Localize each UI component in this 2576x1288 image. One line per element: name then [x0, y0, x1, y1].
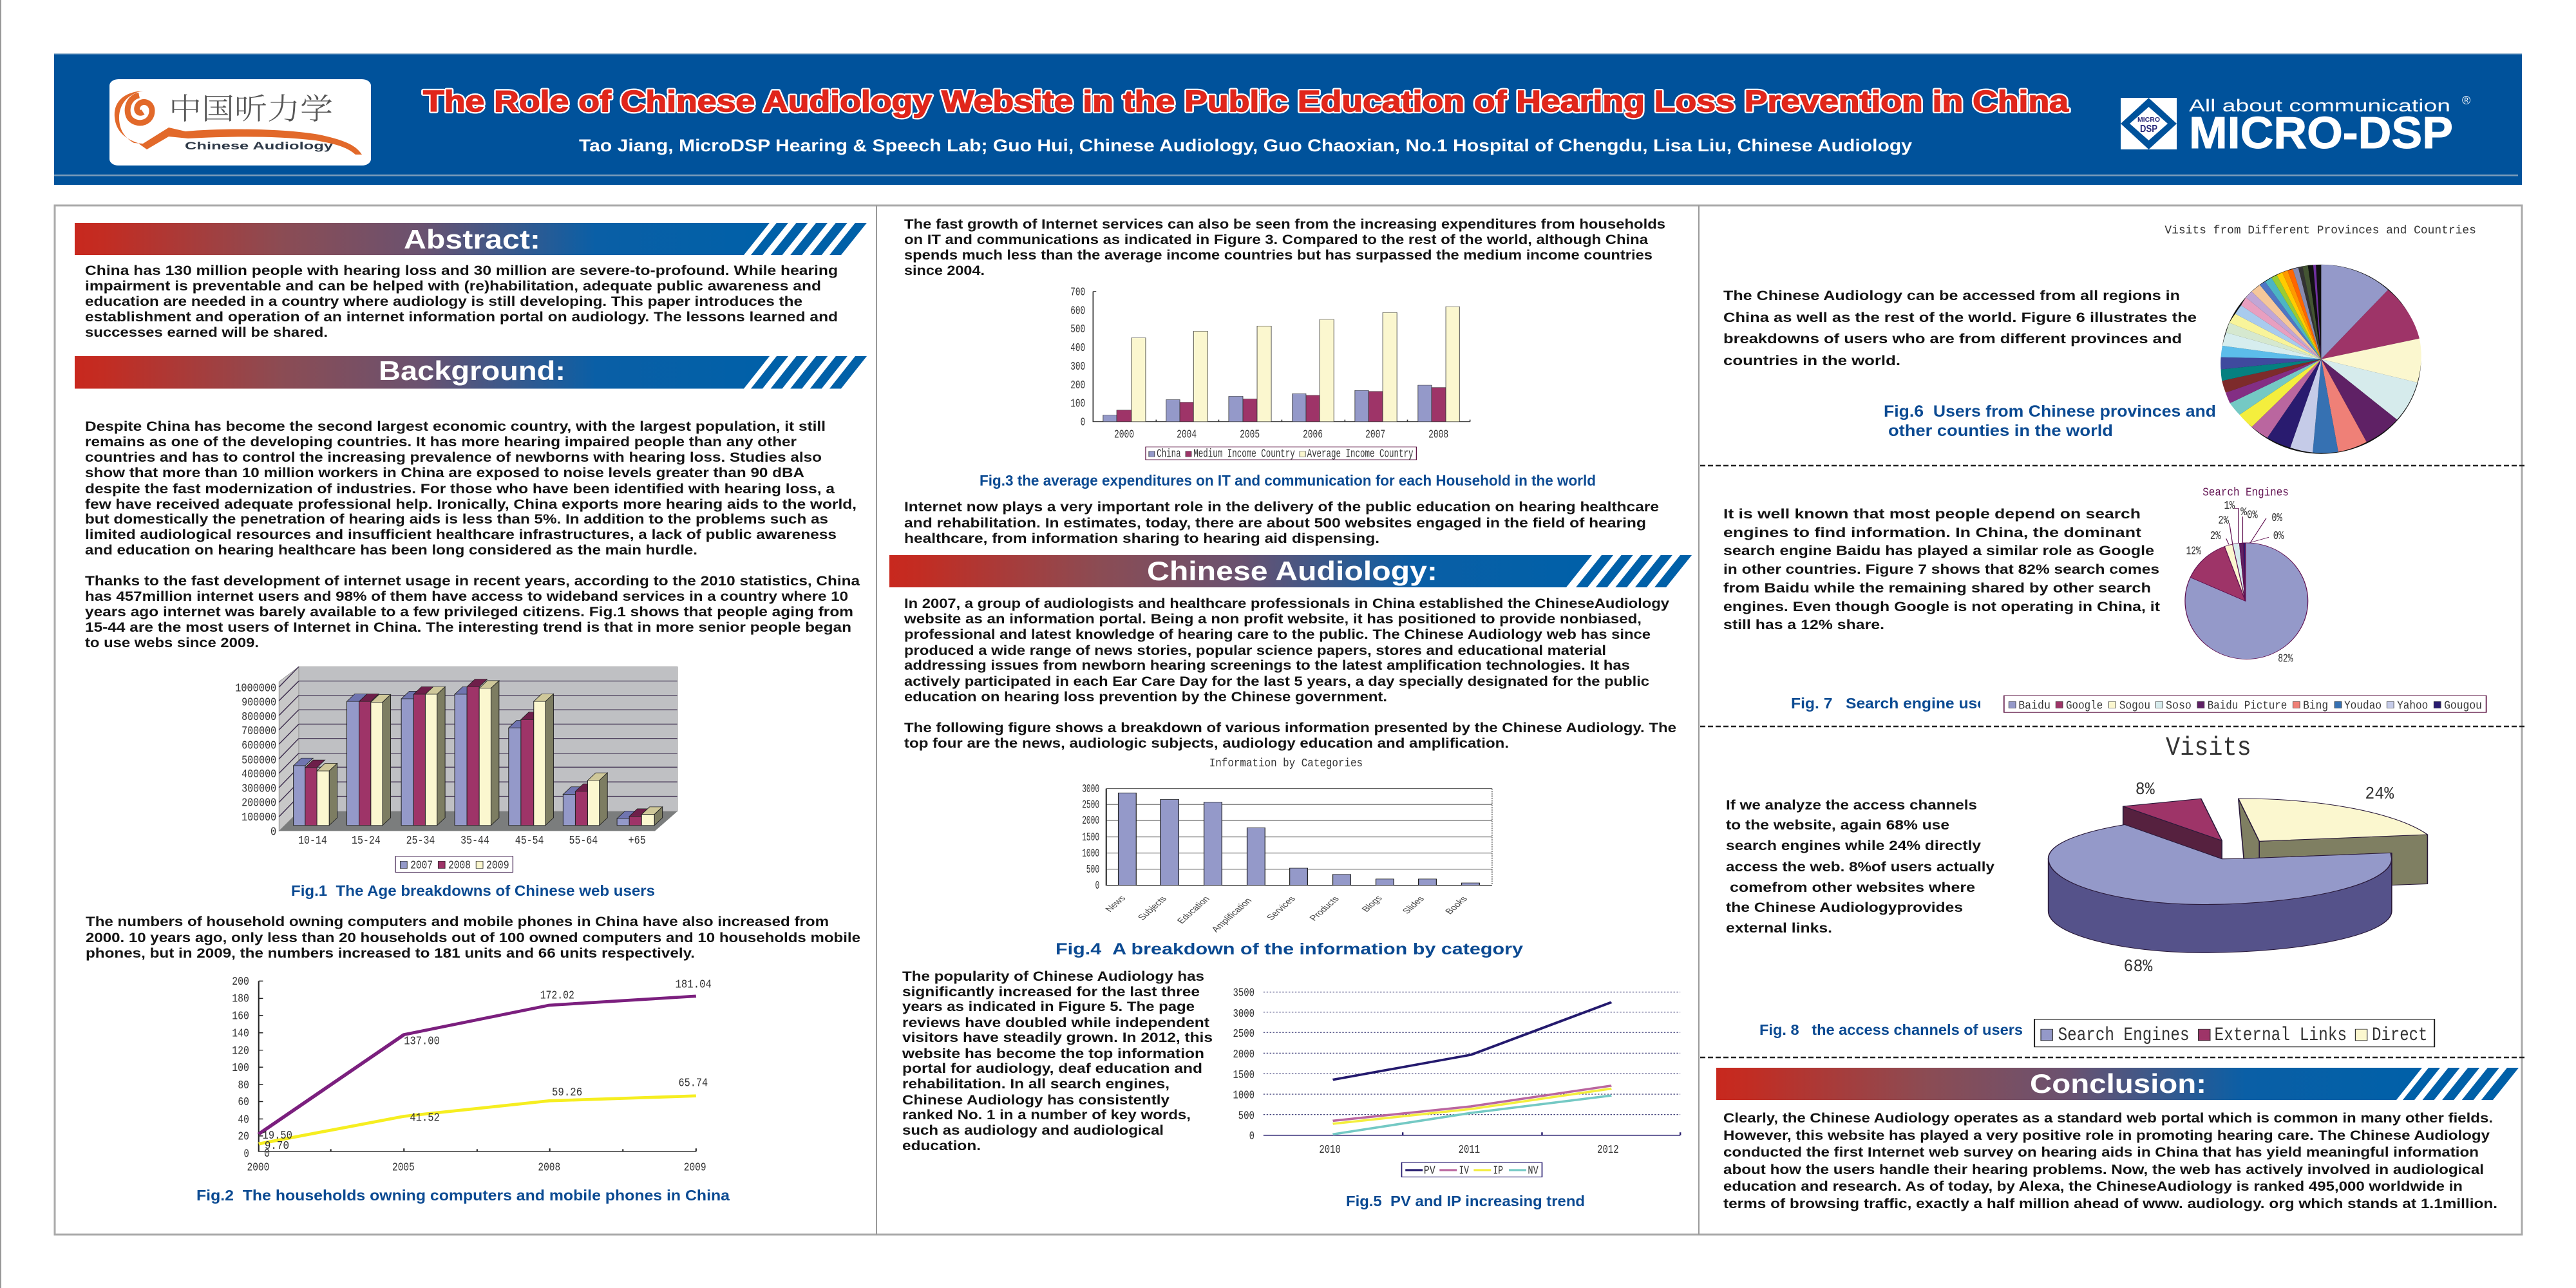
chart: Fig.2 household line chart: 120	[232, 1044, 249, 1057]
chart: Fig.2 household line chart: 2005	[392, 1160, 415, 1174]
chart: Fig.1 3D bars of age breakdown: 0	[270, 825, 276, 838]
bars: 55-64	[563, 773, 607, 826]
text: background paragraph 2	[85, 574, 860, 650]
text: popularity: The popularity of Chinese Audiology has	[902, 969, 1204, 984]
legend: Fig.8: Direct	[2372, 1025, 2427, 1046]
text: internet expenditures: spends much less than the average income countries but has surpassed the medium income countries	[904, 248, 1653, 263]
text: search engines: still has a 12% share.	[1723, 618, 1884, 632]
text: search engines: search engine Baidu has played a similar role as Google	[1723, 544, 2154, 558]
text: background paragraph 1: limited audiological resources and insufficient healthcare infrastructures, a lack of public awareness	[85, 527, 837, 542]
chart: Fig.8 visits 3D pie: 68%	[2124, 956, 2153, 976]
slice: direct 24%	[2239, 799, 2427, 885]
text: Chinese Audiology description: actively participated in each Ear Care Day for the last 5 years, a day specially designated for the public	[904, 674, 1649, 689]
chart: Fig.7 search engines pie: 82%	[2278, 652, 2293, 666]
heading: Chinese Audiology: Chinese Audiology:	[1147, 556, 1437, 586]
chart: Fig.5 PV and IP trend: 500	[1238, 1110, 1255, 1122]
chart: Fig.7 search engines pie: 0%	[2247, 509, 2258, 522]
chart: Fig.5 PV and IP trend: 3000	[1233, 1008, 1255, 1021]
chart: Fig.4 information by categories: Slides	[1400, 895, 1427, 915]
chart: Fig.5 PV and IP trend	[1233, 987, 1680, 1178]
chart: Fig.1 3D bars of age breakdown: 300000	[242, 782, 276, 795]
text: access channels: the Chinese Audiologyprovides	[1726, 900, 1963, 915]
text: popularity: significantly increased for the last three	[902, 985, 1200, 999]
chart: Fig.4 information by categories: Blogs	[1359, 895, 1385, 913]
text: Chinese Audiology description: addressing issues from newborn hearing screenings to the latest amplification technologies. It has	[904, 658, 1630, 673]
text: access channels: external links.	[1726, 921, 1832, 936]
legend: Fig.8: External Links	[2215, 1025, 2347, 1046]
chart: Fig.3 expenditures: 2005	[1240, 428, 1260, 442]
bars: +65	[617, 807, 663, 826]
text: Chinese Audiology description: education on hearing loss prevention by the Chinese government.	[904, 690, 1387, 705]
chart: Fig.2 household line chart: 60	[238, 1095, 249, 1108]
text: background paragraph 1: and education on hearing healthcare has been long considered as the main hurdle.	[85, 543, 697, 558]
title: The Role of Chinese Audiology Website in the Public Education of Hearing Loss Prevention in China	[423, 84, 2069, 118]
text: popularity: website has become the top information	[902, 1046, 1204, 1061]
line: IP	[1333, 1088, 1611, 1124]
chart: Fig.1 3D bars of age breakdown: 45-54	[515, 833, 544, 847]
caption: Fig.5: Fig.5 PV and IP increasing trend	[1346, 1193, 1585, 1209]
text: search engines: It is well known that most people depend on search	[1723, 507, 2141, 522]
text: conclusion: about how the users handle their hearing problems. Now, the web has actively involved in audiological	[1723, 1162, 2484, 1177]
text: popularity	[902, 969, 1213, 1153]
text: internet expenditures: The fast growth of Internet services can also be seen from the increasing expenditures from households	[904, 217, 1665, 232]
text: household ownership: 2000. 10 years ago, only less than 20 households out of 100 owned computers and 10 households mobile	[86, 931, 860, 945]
text: background paragraph 1: despite the fast modernization of industries. For those who have been identified with hearing loss, a	[85, 482, 835, 497]
panel: right column	[1700, 224, 2524, 1211]
chart: Fig.2 household line chart: 137.00	[404, 1034, 440, 1048]
text: household ownership: The numbers of household owning computers and mobile phones in China have also increased from	[86, 914, 829, 929]
chart: Fig.1 3D bars of age breakdown: 500000	[242, 753, 276, 767]
caption: Fig.1: Fig.1 The Age breakdowns of Chinese web users	[291, 882, 655, 899]
chart: Fig.2 household line chart: 2009	[684, 1160, 706, 1174]
text: background paragraph 2: Thanks to the fast development of internet usage in recent years, according to the 2010 statistics, China	[85, 574, 860, 589]
caption: Fig.3: Fig.3 the average expenditures on IT and communication for each Household in the world	[980, 472, 1596, 489]
header banner	[54, 53, 2522, 185]
chart: Fig.2 household line chart	[232, 975, 712, 1174]
legend: Fig.8	[2034, 1019, 2434, 1047]
legend: Fig.1: 2007	[410, 858, 433, 872]
legend: Fig.5: NV	[1528, 1164, 1539, 1178]
caption: Fig.8: Fig. 8 the access channels of users	[1759, 1021, 2023, 1038]
panel: middle column	[889, 217, 1692, 1209]
caption: Fig.6: Fig.6 Users from Chinese provinces and	[1884, 402, 2216, 421]
heading: Abstract	[75, 223, 867, 255]
line: computers	[259, 996, 696, 1134]
legend: Fig.5	[1402, 1162, 1542, 1178]
logo: MICRO-DSP: All about communication	[2189, 96, 2450, 115]
chart: Fig.2 household line chart: 65.74	[678, 1076, 708, 1090]
chart: Fig.2 household line chart: 180	[232, 992, 249, 1005]
chart: Fig.4 information by categories: 0	[1095, 880, 1099, 893]
chart: Fig.4 information by categories: Products	[1307, 895, 1342, 922]
chart: Fig.3 expenditures	[1070, 286, 1470, 460]
chart: Fig.4 information by categories: 2000	[1082, 815, 1099, 828]
legend: Fig.7: Google	[2066, 699, 2103, 713]
chart: Fig.5 PV and IP trend: 2011	[1459, 1144, 1480, 1157]
chart: Fig.7 search engines pie: 2%	[2218, 514, 2229, 527]
bars: 25-34	[401, 687, 445, 826]
legend: Fig.5: PV	[1424, 1164, 1435, 1178]
text: Chinese Audiology description: In 2007, a group of audiologists and healthcare professionals in China established the ChineseAudiology	[904, 596, 1669, 611]
text: abstract: successes earned will be shared.	[85, 325, 328, 340]
logo: Chinese Audiology: 中国听力学	[169, 86, 333, 128]
chart: Fig.2 household line chart: 172.02	[540, 989, 574, 1002]
text: background paragraph 2: 15-44 are the most users of Internet in China. The interesting trend is that in more senior people began	[85, 620, 851, 635]
legend: Fig.7: Gougou	[2444, 699, 2482, 713]
text: access channels: access the web. 8%of users actually	[1726, 860, 1994, 875]
text: background paragraph 1: Despite China has become the second largest economic country, with the largest population, it still	[85, 419, 826, 434]
chart: Fig.1 3D bars of age breakdown: 800000	[242, 710, 276, 724]
chart: Fig.1 3D bars of age breakdown: +65	[629, 833, 646, 847]
chart: Fig.6 pie of provinces and countries	[2164, 224, 2476, 454]
chart: Fig.1 3D bars of age breakdown: 35-44	[460, 833, 489, 847]
chart: Fig.3 expenditures: 200	[1070, 379, 1085, 392]
text: internet expenditures	[904, 217, 1665, 278]
text: background paragraph 2: has 457million internet users and 98% of them have access to wideband services in a country where 10	[85, 589, 848, 604]
legend: Fig.7: Yahoo	[2397, 699, 2428, 713]
text: search engines: in other countries. Figure 7 shows that 82% search comes	[1723, 562, 2159, 577]
text: background paragraph 1: show that more than 10 million workers in China are exposed to noise levels greater than 90 dBA	[85, 466, 804, 480]
chart: Fig.4 information by categories: 1500	[1082, 831, 1099, 844]
chart: Fig.2 household line chart: 40	[238, 1113, 249, 1126]
text: popularity: ranked No. 1 in a number of key words,	[902, 1108, 1191, 1122]
text: breakdown intro: top four are the news, audiologic subjects, audiology education and amplification.	[904, 736, 1509, 751]
chart: Fig.5 PV and IP trend: 3500	[1233, 987, 1255, 1000]
legend: Fig.7: Youdao	[2344, 699, 2382, 713]
chart: Fig.4 information by categories: 500	[1086, 864, 1099, 876]
heading: Background	[75, 355, 867, 389]
text: regions: China as well as the rest of the world. Figure 6 illustrates the	[1723, 310, 2197, 325]
line: PV	[1333, 1002, 1611, 1080]
legend: Fig.7	[2004, 696, 2486, 713]
chart: Fig.8 visits 3D pie	[2034, 734, 2434, 1047]
chart: Fig.2 household line chart: 181.04	[676, 978, 712, 991]
chart: Fig.3 expenditures: 2008	[1428, 428, 1448, 442]
chart: Fig.5 PV and IP trend: 1000	[1233, 1089, 1255, 1103]
legend: Fig.7: Bing	[2303, 699, 2328, 713]
text: Chinese Audiology description	[904, 596, 1669, 705]
text: abstract	[85, 263, 838, 340]
text: Chinese Audiology description: website as an information portal. Being a non profit website, it has positioned to provide nonbiased,	[904, 612, 1642, 627]
text: search engines	[1723, 507, 2160, 632]
text: background paragraph 1: but domestically the penetration of hearing aids is less than 5%. In addition to the problems such as	[85, 512, 828, 527]
heading: Chinese Audiology	[889, 555, 1692, 587]
text: conclusion: However, this website has played a very positive role in promoting hearing care. The Chinese Audiology	[1723, 1128, 2490, 1143]
text: Chinese Audiology description: produced a wide range of news stories, popular science papers, stores and educational material	[904, 643, 1606, 658]
text: internet expenditures: since 2004.	[904, 263, 985, 278]
chart: Fig.1 3D bars of age breakdown	[235, 667, 677, 872]
chart: Fig.7 search engines pie: 2%	[2210, 529, 2221, 543]
caption: Fig.2: Fig.2 The households owning computers and mobile phones in China	[196, 1187, 730, 1204]
chart: Fig.4 information by categories	[1082, 757, 1492, 934]
bars: 15-24	[347, 694, 391, 826]
slice: external links 8%	[2123, 799, 2222, 859]
text: Chinese Audiology description: professional and latest knowledge of hearing care to the public. The Chinese Audiology web has since	[904, 627, 1651, 642]
chart: Fig.8 visits 3D pie: 8%	[2136, 780, 2155, 799]
text: access channels: If we analyze the access channels	[1726, 798, 1977, 813]
text: popularity: Chinese Audiology has consistently	[902, 1093, 1170, 1108]
text: conclusion: Clearly, the Chinese Audiology operates as a standard web portal which is common in many other fields.	[1723, 1111, 2493, 1126]
legend: Fig.1: 2008	[448, 858, 471, 872]
chart: Fig.4 information by categories: Subjects	[1135, 895, 1170, 922]
chart: Fig.3 expenditures: 2000	[1114, 428, 1134, 442]
chart: Fig.7 search engines pie: 12%	[2186, 544, 2201, 558]
text: access channels: to the website, again 68% use	[1726, 818, 1949, 833]
text: background paragraph 1: remains as one of the developing countries. It has more hearing impaired people than any other	[85, 435, 797, 450]
chart: Fig.1 3D bars of age breakdown: 900000	[242, 696, 276, 709]
text: conclusion	[1723, 1111, 2497, 1211]
logo: MICRO-DSP: ®	[2462, 94, 2470, 107]
chart: Fig.7 search engines pie: 0%	[2271, 511, 2282, 525]
chart: Fig.3 expenditures: 2004	[1177, 428, 1197, 442]
text: abstract: education are needed in a country where audiology is still developing. This paper introduces the	[85, 294, 802, 309]
logo: MICRO-DSP: DSP	[2140, 124, 2157, 135]
legend: Fig.7: Baidu Picture	[2208, 699, 2287, 713]
text: abstract: China has 130 million people with hearing loss and 30 million are severe-to-profound. While hearing	[85, 263, 838, 278]
text: breakdown intro	[904, 721, 1676, 751]
chart: Fig.3 expenditures: 600	[1070, 305, 1085, 317]
chart: Fig.7 search engines pie	[2004, 486, 2486, 713]
caption: Fig.7: Fig. 7 Search engine use	[1791, 695, 1986, 712]
chart: Fig.5 PV and IP trend: 2012	[1597, 1144, 1619, 1157]
text: popularity: such as audiology and audiological	[902, 1123, 1164, 1138]
chart: Fig.3 expenditures: 700	[1070, 286, 1085, 299]
chart: Fig.3 expenditures: Average Income Country	[1307, 448, 1413, 460]
chart: Fig.2 household line chart: 200	[232, 975, 249, 989]
text: search engines: engines. Even though Google is not operating in China, it	[1723, 600, 2160, 614]
heading: Conclusion	[1716, 1068, 2519, 1100]
chart: Fig.2 household line chart: 9.70	[265, 1139, 289, 1153]
chart: Fig.5 PV and IP trend: 2000	[1233, 1048, 1255, 1061]
text: role of internet: and rehabilitation. In estimates, today, there are about 500 websites engaged in the field of hearing	[904, 516, 1646, 531]
chart: Fig.2 household line chart: 140	[232, 1027, 249, 1040]
chart: Fig.4 information by categories: Books	[1443, 895, 1470, 916]
chart: Fig.1 3D bars of age breakdown: 15-24	[352, 833, 381, 847]
logo: Chinese Audiology	[109, 79, 371, 166]
text: conclusion: terms of browsing traffic, exactly a half million ahead of www. audiology. org which stands at 1.1million.	[1723, 1197, 2497, 1211]
line: NV	[1333, 1095, 1611, 1134]
legend: Fig.3: China	[1157, 448, 1181, 460]
text: regions: The Chinese Audiology can be accessed from all regions in	[1723, 289, 2180, 303]
chart: Fig.1 3D bars of age breakdown: 700000	[242, 724, 276, 738]
chart: Fig.1 3D bars of age breakdown: 400000	[242, 768, 276, 781]
chart: Fig.2 household line chart: 19.50	[263, 1128, 292, 1142]
chart: Fig.3 expenditures: 100	[1070, 397, 1085, 411]
chart: Fig.1 3D bars of age breakdown: 55-64	[569, 833, 598, 847]
heading: Background: Background:	[379, 355, 565, 386]
main panel frame	[55, 205, 2522, 1235]
authors: Tao Jiang, MicroDSP Hearing & Speech Lab; Guo Hui, Chinese Audiology, Guo Chaoxian, No.1 Hospital of Chengdu, Lisa Liu, Chinese Audiology	[579, 136, 1912, 155]
caption: Fig.4: Fig.4 A breakdown of the information by category	[1056, 940, 1523, 958]
chart: Fig.2 household line chart: 0	[244, 1147, 249, 1160]
text: access channels: search engines while 24% directly	[1726, 838, 1981, 853]
text: abstract: establishment and operation of an internet information portal on audiology. The lessons learned and	[85, 310, 838, 325]
chart: Fig.1 3D bars of age breakdown: 10-14	[298, 833, 327, 847]
chart: Fig.7 search engines pie: %	[2240, 506, 2247, 519]
chart: Fig.4 information by categories: Amplification	[1209, 897, 1255, 934]
text: regions: breakdowns of users who are from different provinces and	[1723, 332, 2182, 346]
legend: Fig.7: Sogou	[2119, 699, 2150, 713]
chart: Fig.2 household line chart: 2008	[538, 1160, 560, 1174]
text: household ownership	[86, 914, 860, 961]
caption: Fig.6: other counties in the world	[1888, 422, 2113, 440]
legend: Fig.8: Search Engines	[2058, 1025, 2190, 1046]
legend: Fig.7: Soso	[2166, 699, 2192, 713]
chart: Fig.5 PV and IP trend: 2010	[1319, 1144, 1341, 1157]
text: popularity: education.	[902, 1139, 981, 1153]
text: role of internet	[904, 500, 1659, 546]
chart: Fig.8 visits 3D pie: 24%	[2365, 784, 2394, 804]
text: access channels	[1726, 798, 1994, 936]
text: background paragraph 2: years ago internet was barely available to a few privileged citizens. Fig.1 shows that people aging from	[85, 605, 853, 620]
chart: Fig.4 information by categories: Services	[1264, 895, 1298, 922]
chart: Fig.1 3D bars of age breakdown: 100000	[242, 810, 276, 824]
chart: Fig.2 household line chart: 100	[232, 1061, 249, 1075]
slice: search engines 68%	[2049, 824, 2392, 952]
text: background paragraph 2: to use webs since 2009.	[85, 636, 259, 650]
chart: Fig.3 expenditures: 400	[1070, 342, 1085, 355]
chart: Fig.2 household line chart: 59.26	[552, 1086, 582, 1099]
logo: MICRO-DSP	[2121, 94, 2470, 158]
text: abstract: impairment is preventable and can be helped with (re)habilitation, adequate public awareness and	[85, 279, 821, 294]
legend: Fig.5: IV	[1459, 1164, 1469, 1178]
legend: Fig.1	[395, 857, 513, 872]
chart: Fig.5 PV and IP trend: 2500	[1233, 1028, 1255, 1041]
text: popularity: reviews have doubled while independent	[902, 1016, 1209, 1030]
text: household ownership: phones, but in 2009, the numbers increased to 181 units and 66 units respectively.	[86, 946, 695, 961]
legend: Fig.7: Baidu	[2018, 699, 2050, 713]
chart: Fig.1 3D bars of age breakdown: 1000000	[235, 681, 276, 695]
chart: Fig.7 search engines pie: 1%	[2224, 499, 2235, 513]
logo: MICRO-DSP: MICRO	[2137, 117, 2160, 124]
chart: Fig.2 household line chart: 20	[238, 1130, 249, 1143]
bars: 35-44	[455, 679, 499, 826]
bars: 10-14	[294, 758, 337, 826]
chart: Fig.3 expenditures: 2006	[1303, 428, 1323, 442]
text: search engines: engines to find information. In China, the dominant	[1723, 526, 2141, 540]
text: background paragraph 1: countries and has to control the increasing prevalence of newborns with hearing loss. Studies also	[85, 450, 822, 465]
text: popularity: portal for audiology, deaf education and	[902, 1061, 1202, 1076]
text: breakdown intro: The following figure shows a breakdown of various information presented by the Chinese Audiology. The	[904, 721, 1676, 735]
line: IV	[1333, 1086, 1611, 1121]
chart: Fig.3 expenditures: 300	[1070, 361, 1085, 374]
text: conclusion: education and research. As of today, by Alexa, the ChineseAudiology is ranked 495,000 worldwide in	[1723, 1179, 2463, 1194]
legend: Fig.5: IP	[1493, 1164, 1503, 1178]
chart: Fig.4 information by categories: Education	[1175, 895, 1213, 925]
chart: Fig.2 household line chart: 80	[238, 1078, 249, 1092]
chart: Fig.7 search engines pie: Search Engines	[2202, 486, 2289, 499]
chart: Fig.1 3D bars of age breakdown: 25-34	[406, 833, 435, 847]
chart: Fig.4 information by categories: 2500	[1082, 799, 1099, 812]
text: background paragraph 1	[85, 419, 857, 558]
chart: Fig.3 expenditures: 500	[1070, 323, 1085, 336]
text: background paragraph 1: few have received adequate professional help. Ironically, China exports more hearing aids to the world,	[85, 497, 857, 512]
logo: Chinese Audiology: Chinese Audiology	[185, 140, 334, 152]
text: conclusion: conducted the first Internet web survey on hearing aids in China that has yield meaningful information	[1723, 1145, 2479, 1160]
logo: MICRO-DSP: MICRO-DSP	[2189, 108, 2453, 158]
text: popularity: visitors have steadily grown. In 2012, this	[902, 1030, 1213, 1045]
chart: Fig.4 information by categories: Information by Categories	[1209, 757, 1363, 770]
text: access channels: comefrom other websites where	[1730, 880, 1975, 895]
title: The Role of Chinese Audiology Website in the Public Education of Hearing Loss Prevention in China	[423, 84, 2069, 118]
heading: Conclusion: Conclusion:	[2030, 1068, 2206, 1099]
heading: Abstract: Abstract:	[404, 224, 540, 254]
chart: Fig.4 information by categories: 3000	[1082, 783, 1099, 796]
line: mobile phones	[259, 1096, 696, 1144]
caption: Fig.6	[1884, 402, 2216, 440]
legend: Fig.3: Medium Income Country	[1193, 448, 1295, 460]
chart: Fig.2 household line chart: 2000	[247, 1160, 269, 1174]
text: internet expenditures: on IT and communications as indicated in Figure 3. Compared to the rest of the world, although China	[904, 232, 1648, 247]
text: search engines: from Baidu while the remaining shared by other search	[1723, 581, 2151, 596]
chart: Fig.2 household line chart: 160	[232, 1009, 249, 1023]
chart: Fig.5 PV and IP trend: 1500	[1233, 1069, 1255, 1082]
text: popularity: rehabilitation. In all search engines,	[902, 1077, 1170, 1092]
chart: Fig.4 information by categories: News	[1103, 895, 1129, 913]
chart: Fig.1 3D bars of age breakdown: 600000	[242, 739, 276, 752]
chart: Fig.1 3D bars of age breakdown: 200000	[242, 796, 276, 810]
chart: Fig.7 search engines pie: 0%	[2273, 529, 2284, 543]
bars: 45-54	[509, 694, 553, 826]
text: regions: countries in the world.	[1723, 354, 1900, 368]
chart: Fig.2 household line chart: 0	[264, 1147, 270, 1160]
chart: Fig.3 expenditures: 2007	[1365, 428, 1385, 442]
chart: Fig.8 visits 3D pie: Visits	[2166, 734, 2251, 763]
text: role of internet: healthcare, from information sharing to hearing aid dispensing.	[904, 531, 1379, 546]
text: role of internet: Internet now plays a very important role in the delivery of the public education on hearing healthcare	[904, 500, 1659, 515]
chart: Fig.4 information by categories: 1000	[1082, 848, 1099, 860]
chart: Fig.3 expenditures: 0	[1081, 416, 1085, 429]
legend: Fig.1: 2009	[486, 858, 509, 872]
text: regions	[1723, 289, 2197, 368]
text: popularity: years as indicated in Figure 5. The page	[902, 999, 1195, 1014]
chart: Fig.5 PV and IP trend: 0	[1249, 1130, 1255, 1143]
chart: Fig.2 household line chart: 41.52	[410, 1111, 440, 1124]
panel: left column	[75, 223, 867, 1204]
